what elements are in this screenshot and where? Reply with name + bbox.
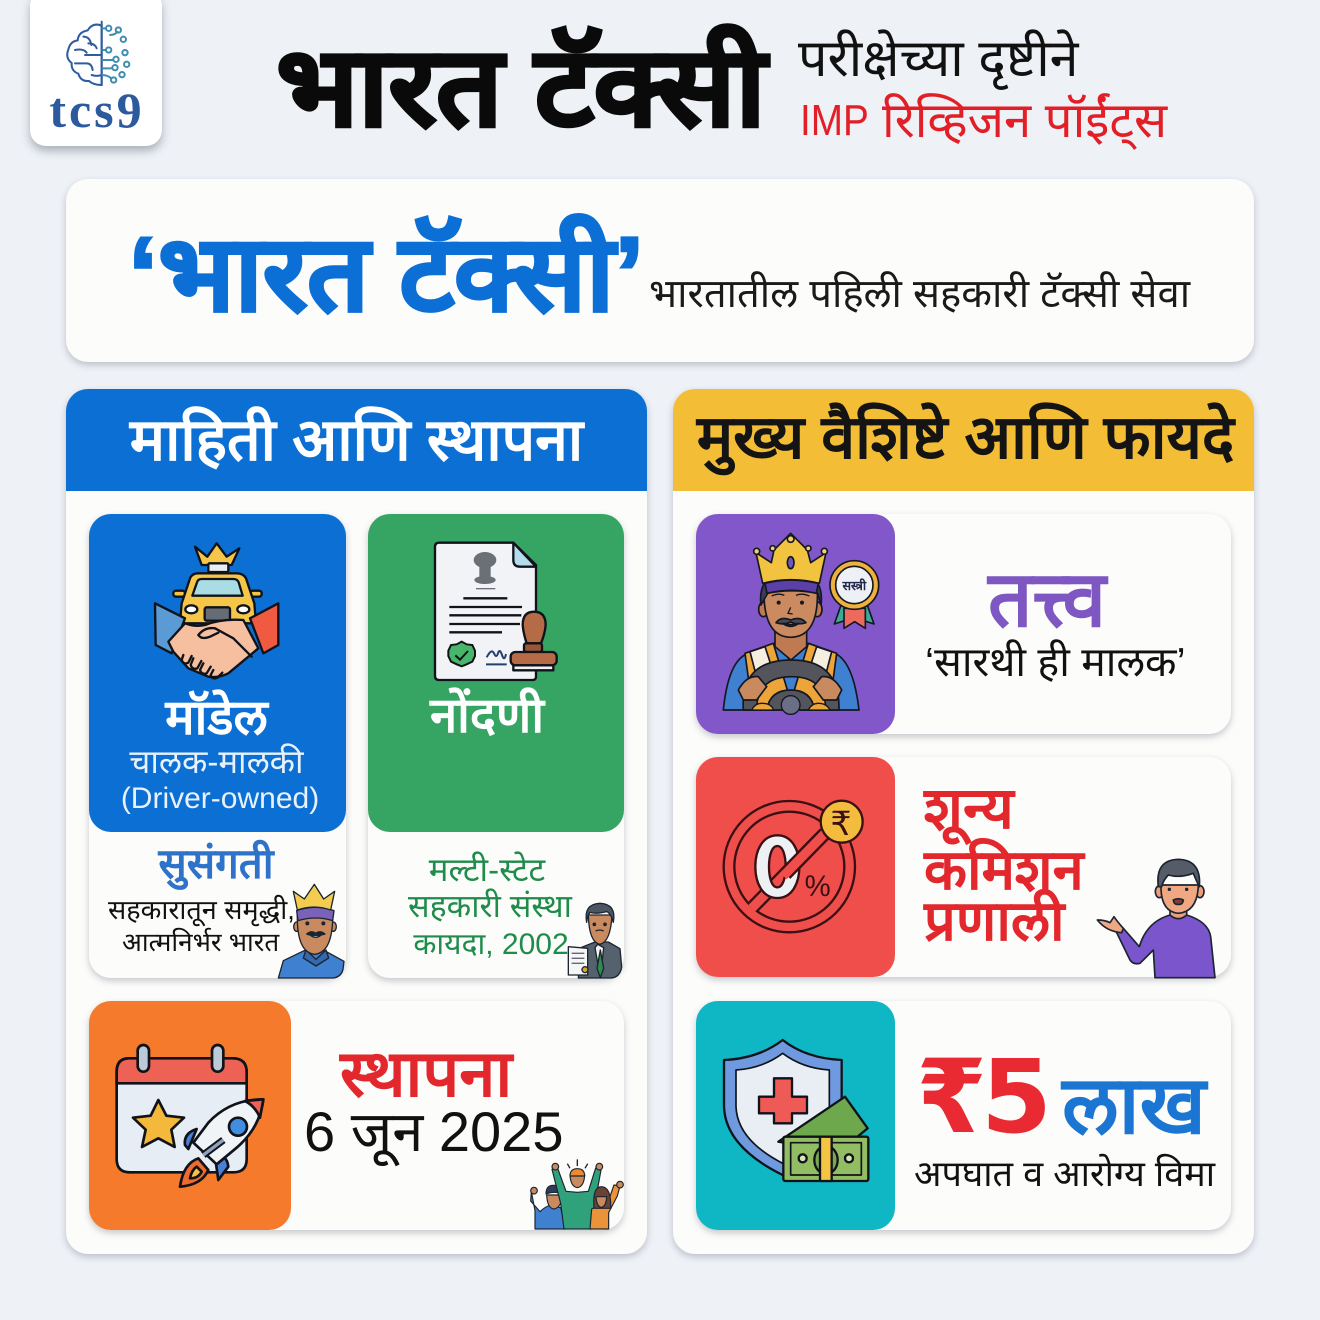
panel header: मुख्य वैशिष्टे आणि फायदे (697, 403, 1234, 471)
icon: taxi driver (278, 884, 345, 979)
commission title: प्रणाली (924, 889, 1065, 952)
insurance amount: ₹5 (916, 1038, 1046, 1157)
panel: banner (66, 179, 1254, 362)
registration text (408, 851, 572, 961)
icon: shield and cash (722, 1038, 870, 1182)
banner heading: ‘भारत टॅक्सी’ (128, 216, 644, 333)
registration text: सहकारी संस्था (408, 888, 572, 924)
subtitle (798, 29, 1168, 150)
icon: brain circuit (66, 20, 130, 86)
card: principle (696, 514, 1231, 734)
title: भारत टॅक्सी (276, 26, 766, 149)
compatibility title: सुसंगती (158, 840, 274, 887)
commission title: कमिशन (924, 838, 1084, 901)
panel header (673, 389, 1254, 491)
icon: driver owner (722, 532, 880, 715)
model text english: (Driver-owned) (121, 782, 319, 815)
card: model (89, 514, 346, 978)
card: establishment (89, 1001, 624, 1230)
icon: driver owner: सस्त्री (841, 578, 867, 593)
compatibility text line 2: आत्मनिर्भर भारत (122, 927, 279, 957)
compatibility text: सहकारातून समृद्धी, (108, 895, 295, 925)
icon: presenter (1096, 858, 1216, 978)
panel: information and establishment (66, 389, 647, 1254)
establishment title: स्थापना (340, 1037, 512, 1110)
icon: calendar rocket (115, 1044, 265, 1188)
icon: taxi handshake (154, 542, 280, 680)
purple block (696, 514, 895, 734)
card: zero commission (696, 757, 1231, 977)
model text: चालक-मालकी (129, 743, 304, 780)
card: registration (368, 514, 624, 978)
principle title: तत्त्व (988, 555, 1106, 643)
registration green block (368, 514, 624, 832)
principle text: ‘सारथी ही मालक’ (925, 639, 1186, 685)
registration text: कायदा, 2002 (413, 928, 569, 961)
panel header (66, 389, 647, 491)
model blue block (89, 514, 346, 832)
teal block (696, 1001, 895, 1230)
banner subtitle: भारतातील पहिली सहकारी टॅक्सी सेवा (649, 272, 1190, 316)
commission title: शून्य (924, 776, 1014, 841)
orange block (89, 1001, 291, 1230)
registration text: मल्टी-स्टेट (429, 851, 545, 888)
logo (30, 0, 162, 146)
establishment date: 6 जून 2025 (304, 1100, 563, 1163)
red block (696, 757, 895, 977)
insurance unit: लाख (1062, 1061, 1206, 1151)
icon: no commission (722, 800, 864, 934)
registration title: नोंदणी (430, 689, 544, 743)
icon: no commission: % (805, 870, 831, 903)
icon: people celebrating (530, 1159, 624, 1230)
subtitle: IMP (800, 96, 869, 145)
commission title (923, 776, 1086, 952)
icon: no commission: ₹ (830, 804, 852, 843)
icon: document and stamp (434, 541, 558, 682)
subtitle: परीक्षेच्या दृष्टीने (798, 30, 1079, 88)
model title: मॉडेल (165, 691, 268, 745)
logo text: tcs9 (49, 82, 145, 138)
card: insurance (696, 1001, 1231, 1230)
panel: features and benefits (673, 389, 1254, 1254)
icon: officer (568, 902, 622, 979)
panel header: माहिती आणि स्थापना (130, 407, 583, 473)
subtitle: रिव्हिजन पॉईंट्स (882, 94, 1167, 148)
insurance text: अपघात व आरोग्य विमा (914, 1153, 1215, 1194)
